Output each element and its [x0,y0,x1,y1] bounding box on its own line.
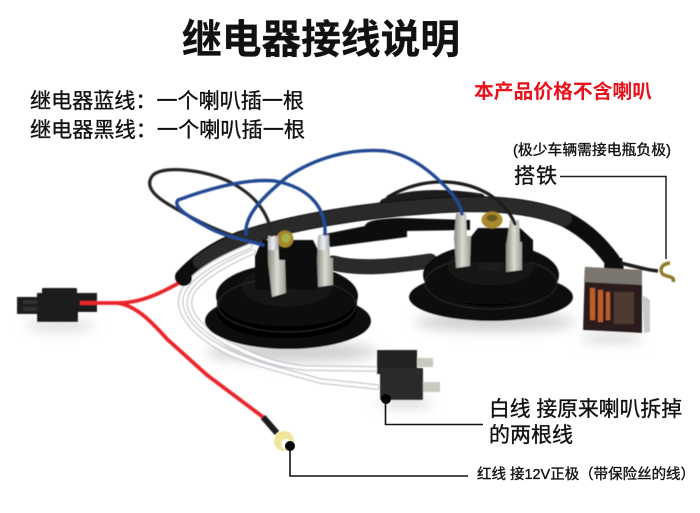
relay [583,257,650,333]
mounting bracket [320,218,470,247]
callout: white wire [381,394,682,447]
corrugated conduit, rear [183,196,612,277]
black wire, left horn [150,170,272,243]
thin wires [150,150,515,245]
callout: white wire: 白线 接原来喇叭拆掉 [489,398,682,421]
terminals [454,213,471,268]
note: horns not included: 本产品价格不含喇叭 [474,80,652,103]
callout: ground label [513,142,671,259]
short blue wire [177,181,325,245]
photo: relay harness and horns [17,150,673,451]
ring terminal [263,417,294,451]
callout: red wire: 红线 接12V正极（带保险丝的线） [477,466,695,483]
horn left [205,230,371,349]
fuse connector [17,288,97,322]
title: 继电器接线说明 [182,18,460,62]
red wire into connector [80,301,97,305]
callout: ground label: 搭铁 [514,165,557,188]
note: black wire: 继电器黑线：一个喇叭插一根 [30,119,305,142]
white wires [181,246,377,387]
horn right [409,212,573,321]
note: blue wire: 继电器蓝线：一个喇叭插一根 [30,90,304,113]
callout: red wire [285,441,695,483]
H-plug connectors [377,350,440,400]
callout: ground label: (极少车辆需接电瓶负极) [513,142,671,159]
red wires [80,280,263,417]
black wire, right horn [388,182,515,224]
conduit end [176,270,192,286]
soft shadows [25,313,644,407]
ground wire and fork [620,263,673,282]
mounting nut [276,230,294,248]
blue and black wire terminals [268,236,286,297]
callout: white wire: 的两根线 [489,424,573,447]
mounting nut [482,212,502,228]
long blue wire [246,150,462,234]
